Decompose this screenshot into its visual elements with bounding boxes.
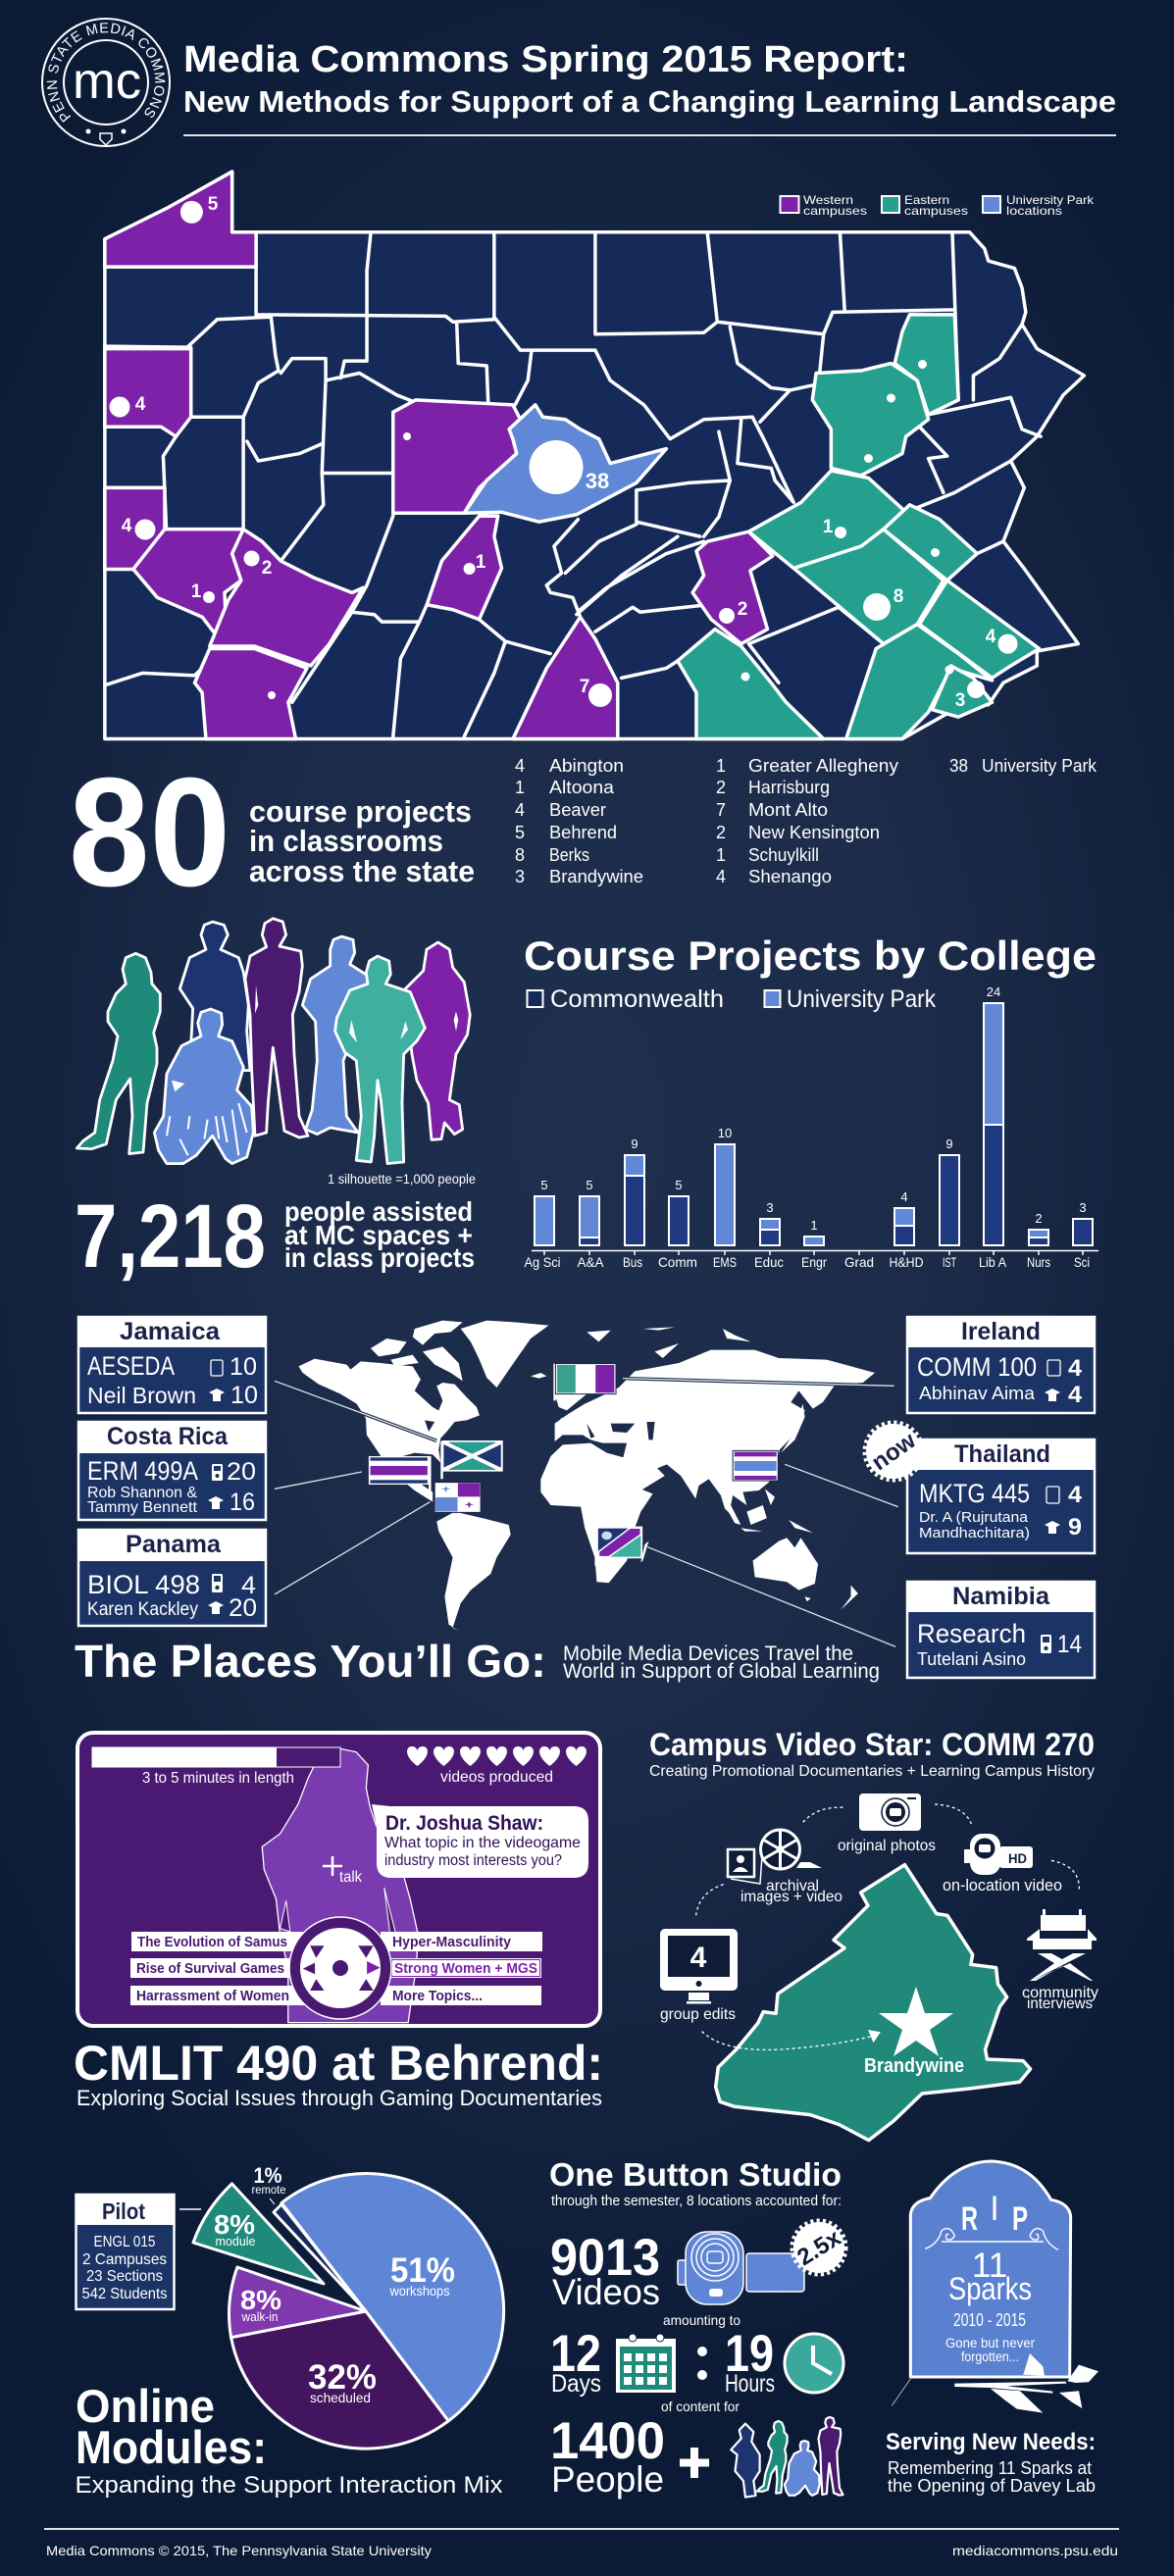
heading: The Places You'll Go: Mobile Media Devices Travel the [563, 1642, 853, 1665]
map of Pennsylvania campuses: 1 [191, 581, 202, 602]
flag: Ireland [555, 1364, 616, 1400]
map of Pennsylvania campuses: 1 [476, 552, 486, 573]
bar chart: course projects by college: 3 [1079, 1200, 1087, 1215]
icon: monitor with 4 group edits: 4 [690, 1942, 707, 1974]
bar chart: course projects by college: Nurs [1027, 1254, 1050, 1270]
campus project count list: 8 [515, 845, 525, 865]
card: Thailand: Thailand [954, 1440, 1050, 1468]
chart legend [528, 985, 936, 1013]
heading: The Places You'll Go: World in Support of Global Learning [563, 1660, 880, 1683]
connector lines from flags to destination cards [275, 1379, 898, 1646]
talk prompt: talk [339, 1869, 363, 1886]
bar chart: course projects by college: IST [943, 1254, 956, 1270]
campus project count list: 5 [515, 823, 525, 842]
flag: Thailand [732, 1450, 778, 1489]
icon: HD video camera: HD [1008, 1851, 1027, 1866]
heading: The Places You'll Go: The Places You’ll Go: [75, 1636, 546, 1687]
pie labels: walk-in [241, 2309, 279, 2324]
caption: Serving New Needs [886, 2429, 1096, 2496]
dashed process arcs [695, 1804, 1079, 2049]
campus project count list: 38 [949, 756, 968, 776]
campus project count list: 1 [716, 756, 726, 776]
heading: Campus Video Star [649, 1727, 1095, 1780]
caption: Serving New Needs: the Opening of Davey Lab [888, 2476, 1096, 2496]
label: Brandywine: Brandywine [864, 2055, 964, 2077]
slice: remote [274, 2204, 366, 2311]
campus project count list: 1 [716, 845, 726, 865]
campus project count list: 2 [716, 823, 726, 842]
silhouettes of people [77, 919, 470, 1164]
campus project count list: Shenango [748, 867, 832, 886]
topic menu [130, 1932, 542, 2005]
footer: mediacommons.psu.edu [952, 2543, 1118, 2558]
chart legend: University Park [787, 985, 936, 1013]
slice: scheduled [231, 2311, 448, 2449]
campus project count list: 4 [716, 867, 726, 886]
campus project count list: 3 [515, 867, 525, 886]
card: Costa Rica: Rob Shannon & [87, 1485, 197, 1501]
card: Panama: 4 [241, 1572, 256, 1599]
logo: Penn State Media Commons seal: PENN STATE MEDIA COMMONS [47, 23, 165, 123]
card: Ireland [906, 1316, 1096, 1413]
map legend: campuses [803, 204, 867, 218]
heading: CMLIT 490 at Behrend: CMLIT 490 at Behrend: [74, 2036, 603, 2091]
card: Ireland: 4 [1068, 1382, 1083, 1408]
callout: Pilot: 23 Sections [86, 2268, 163, 2285]
stat: 1400 people: 1400 [550, 2412, 665, 2470]
title: Media Commons Spring 2015 Report: [183, 39, 908, 80]
tombstone: 11 Sparks: P [1012, 2200, 1028, 2238]
footer [44, 2528, 1119, 2558]
card: Thailand: 9 [1068, 1514, 1082, 1541]
card: Costa Rica [77, 1421, 267, 1520]
tombstone: 11 Sparks [910, 2161, 1071, 2377]
map of Pennsylvania campuses: 5 [208, 194, 219, 215]
card: Namibia: 14 [1057, 1631, 1082, 1658]
map of Pennsylvania campuses: 1 [823, 517, 834, 537]
text: of content for: of content for [661, 2399, 740, 2414]
bar chart: course projects by college: 1 [810, 1218, 818, 1233]
slice: walk-in [230, 2267, 366, 2338]
card: Panama: Karen Kackley [87, 1599, 198, 1620]
map legend [781, 193, 1095, 218]
stat: 80 course projects: across the state [249, 854, 475, 888]
pie labels: 51% [390, 2251, 455, 2290]
map legend: locations [1006, 204, 1062, 218]
heading: The Places You'll Go [75, 1636, 880, 1687]
progress caption: 3 to 5 minutes in length [142, 1770, 294, 1787]
icon: calendar [616, 2334, 676, 2393]
title [183, 39, 1116, 136]
pie labels: remote [251, 2185, 286, 2197]
callout: Pilot: ENGL 015 [94, 2234, 156, 2250]
bar chart: course projects by college [524, 985, 1098, 1270]
campus project count list: New Kensington [748, 823, 880, 842]
stat: 7,218 people assisted: at MC spaces + [284, 1220, 473, 1250]
bar chart: course projects by college: Sci [1074, 1254, 1090, 1270]
campus project count list: Harrisburg [748, 778, 830, 797]
bar chart: course projects by college: 5 [675, 1178, 683, 1192]
pie labels: module [216, 2234, 255, 2248]
topic menu: Rise of Survival Games [136, 1961, 284, 1977]
card: Jamaica: Jamaica [120, 1318, 221, 1345]
map legend: campuses [904, 204, 968, 218]
world map [298, 1321, 875, 1631]
campus project count list: Schuylkill [748, 845, 819, 865]
heading: Online Modules: Online [76, 2380, 215, 2432]
card: Jamaica: 10 [230, 1382, 258, 1409]
flowers at tombstone [892, 2353, 1098, 2413]
bar chart: course projects by college: 2 [1035, 1211, 1043, 1226]
card: Costa Rica: 20 [227, 1458, 256, 1486]
card: Namibia: Namibia [952, 1583, 1050, 1610]
icon: director's chair [1027, 1909, 1097, 1981]
bar chart: course projects by college: EMS [713, 1254, 737, 1270]
bar chart: course projects by college: 5 [586, 1178, 593, 1192]
badge: now: now [867, 1427, 921, 1476]
stat: 9013 videos: Videos [552, 2272, 660, 2312]
bar chart: course projects by college: 24 [987, 985, 1000, 999]
heading: Online Modules: Expanding the Support Interaction Mix [75, 2472, 502, 2499]
stat: 1400 people [550, 2412, 665, 2500]
pie labels: scheduled [310, 2390, 371, 2405]
speech bubble: Dr. Joshua Shaw: Dr. Joshua Shaw: [385, 1812, 543, 1835]
campus project count list: Behrend [549, 823, 617, 842]
label: archival images + video [740, 1878, 842, 1905]
bar chart: course projects by college: Engr [801, 1254, 827, 1270]
pie labels: 32% [308, 2358, 377, 2397]
callout: Pilot [75, 2194, 201, 2309]
chart legend: Commonwealth [550, 985, 724, 1013]
icon: HD video camera [964, 1834, 1033, 1875]
speech bubble: Dr. Joshua Shaw: What topic in the videogame [384, 1835, 581, 1851]
map legend: University Park [1006, 193, 1095, 207]
bar chart: course projects by college: Educ [754, 1254, 784, 1270]
label: archival images + video: archival [766, 1878, 819, 1894]
map of Pennsylvania campuses: 4 [986, 627, 996, 647]
stat: 7,218 people assisted [75, 1187, 475, 1287]
tombstone: 11 Sparks: forgotten... [961, 2349, 1019, 2364]
heading: Campus Video Star: Campus Video Star: COMM 270 [649, 1727, 1095, 1762]
card: Thailand: Dr. A (Rujrutana [919, 1509, 1029, 1526]
title: New Methods for Support of a Changing Learning Landscape [183, 84, 1116, 119]
campus project count list: 7 [716, 800, 726, 820]
bar chart: course projects by college: 5 [540, 1178, 548, 1192]
campus project count list: University Park [982, 756, 1097, 776]
tombstone: 11 Sparks: I [992, 2190, 997, 2228]
caption: Serving New Needs: Serving New Needs: [886, 2429, 1096, 2455]
campus project count list: Abington [549, 756, 624, 776]
panel: CMLIT 490 video game interface [77, 1733, 600, 2026]
card: Ireland: 4 [1068, 1355, 1083, 1382]
stat: 7,218 people assisted: people assisted [284, 1196, 473, 1227]
card: Namibia [906, 1581, 1096, 1678]
card: Ireland: Abhinav Aima [919, 1384, 1036, 1403]
bar chart: course projects by college: 9 [945, 1136, 953, 1151]
stat: 19 hours: Hours [725, 2370, 775, 2398]
pie labels: 1% [253, 2163, 282, 2188]
bar chart: course projects by college: 9 [631, 1136, 638, 1151]
card: Thailand [906, 1439, 1096, 1553]
pie chart: support interaction mix [193, 2174, 504, 2449]
campus project count list: Brandywine [549, 867, 643, 886]
card: Panama: BIOL 498 [87, 1570, 200, 1599]
stat: 19 hours: 19 [725, 2325, 774, 2383]
campus project count list: Berks [549, 845, 589, 865]
callout: Pilot: 542 Students [82, 2286, 167, 2302]
stat: 80 course projects [69, 746, 475, 919]
map of Pennsylvania campuses: 4 [122, 516, 132, 536]
stat: 9013 videos [550, 2229, 660, 2312]
topic menu: Strong Women + MGS [394, 1961, 537, 1977]
stat: 9013 videos: 9013 [550, 2229, 660, 2287]
star: Brandywine [879, 1987, 953, 2056]
badge: 2.5x: 2.5x [792, 2224, 846, 2271]
campus project count list [515, 756, 1097, 886]
pie labels: 8% [240, 2285, 281, 2315]
card: Thailand: 4 [1068, 1482, 1083, 1508]
bar chart: course projects by college: Ag Sci [524, 1254, 561, 1270]
icon: photo camera [859, 1793, 921, 1831]
label: group edits: group edits [660, 2006, 736, 2023]
card: Costa Rica: 16 [230, 1489, 255, 1516]
heading: One Button Studio [549, 2156, 842, 2209]
talk prompt [323, 1856, 363, 1886]
stat: 7,218 people assisted: 7,218 [75, 1187, 266, 1287]
map of Pennsylvania campuses: 7 [580, 677, 589, 697]
tombstone: 11 Sparks: R [961, 2200, 978, 2238]
map legend: Eastern [904, 193, 949, 207]
footer: Media Commons © 2015, The Pennsylvania State University [46, 2543, 432, 2558]
card: Jamaica: AESEDA [87, 1351, 175, 1381]
card: Jamaica: Neil Brown [87, 1383, 196, 1408]
heading: CMLIT 490 at Behrend: Exploring Social Issues through Gaming Documentaries [77, 2086, 602, 2110]
pie labels [214, 2163, 455, 2405]
flag: Costa Rica [369, 1456, 430, 1495]
hearts caption: videos produced [440, 1769, 553, 1786]
icon: camcorder [678, 2232, 804, 2304]
topic menu: Harrassment of Women [136, 1989, 289, 2004]
card: Jamaica: 10 [230, 1353, 257, 1381]
hearts: videos produced [407, 1746, 587, 1766]
heading: Campus Video Star: Creating Promotional Documentaries + Learning Campus History [649, 1763, 1095, 1780]
stat: 80 course projects: in classrooms [249, 824, 443, 858]
label: community interviews: community [1022, 1985, 1098, 2001]
tombstone: 11 Sparks: Gone but never [945, 2335, 1035, 2350]
icon: monitor with 4 group edits [660, 1929, 738, 2004]
card: Ireland: COMM 100 [917, 1352, 1037, 1382]
silhouette of speaker [262, 1748, 418, 2023]
campus project count list: 4 [515, 756, 525, 776]
stat: 80 course projects: course projects [249, 794, 472, 829]
label: community interviews [1022, 1985, 1098, 2012]
slice: workshops [281, 2174, 504, 2421]
card: Costa Rica: Tammy Bennett [87, 1499, 198, 1516]
tombstone: 11 Sparks: Sparks [948, 2271, 1032, 2306]
plus sign [680, 2448, 709, 2478]
caption: Serving New Needs: Remembering 11 Sparks at [888, 2458, 1092, 2478]
pie labels: workshops [389, 2283, 449, 2298]
stat: 1400 people: People [551, 2459, 664, 2500]
campus project count list: 4 [515, 800, 525, 820]
card: Thailand: Mandhachitara) [919, 1525, 1030, 1541]
card: Panama: Panama [126, 1531, 222, 1558]
bar chart: course projects by college: A&A [577, 1254, 604, 1270]
heading: Online Modules [75, 2380, 502, 2499]
campus project count list: 1 [515, 778, 525, 797]
map of Pennsylvania campuses: 8 [893, 586, 903, 607]
bar chart: course projects by college: 4 [900, 1189, 908, 1204]
map legend: Western [803, 193, 853, 207]
campus project count list: Beaver [549, 800, 606, 820]
text: amounting to: amounting to [663, 2312, 740, 2328]
tombstone: 11 Sparks: 11 [972, 2247, 1007, 2285]
card: Costa Rica: ERM 499A [87, 1456, 198, 1486]
map of Pennsylvania campuses [105, 172, 1084, 739]
card: Ireland: Ireland [961, 1318, 1041, 1345]
remote leader line [270, 2198, 275, 2204]
stat: 7,218 people assisted: in class projects [284, 1242, 475, 1273]
stat: 80 course projects: 80 [69, 746, 230, 919]
flag: Jamaica [442, 1441, 502, 1479]
silhouette scale note: 1 silhouette =1,000 people [328, 1172, 476, 1187]
bar chart: course projects by college: Bus [623, 1254, 642, 1270]
map of Pennsylvania campuses: 2 [738, 599, 747, 620]
icon: film reel and photos [728, 1830, 822, 1884]
silhouettes: four people [731, 2417, 842, 2498]
bar chart: course projects by college: Comm [658, 1254, 697, 1270]
card: Panama: 20 [229, 1594, 257, 1622]
card: Costa Rica: Costa Rica [107, 1423, 229, 1450]
map of Pennsylvania campuses: 38 [586, 469, 609, 493]
heading: Online Modules: Modules: [76, 2421, 267, 2473]
bar chart: course projects by college: H&HD [889, 1254, 924, 1270]
card: Namibia: Tutelani Asino [917, 1649, 1026, 1669]
bar chart: course projects by college: 3 [766, 1200, 774, 1215]
speech bubble: Dr. Joshua Shaw [372, 1804, 588, 1878]
callout: Pilot: Pilot [102, 2198, 145, 2224]
slice: module [193, 2184, 324, 2284]
card: Panama [77, 1529, 267, 1626]
topic menu: The Evolution of Samus [137, 1935, 287, 1950]
colon [697, 2347, 707, 2380]
map of Pennsylvania campuses: 2 [262, 558, 272, 579]
bar chart: course projects by college: Grad [844, 1254, 874, 1270]
label: on-location video: on-location video [943, 1877, 1062, 1894]
campus project count list: Altoona [549, 778, 615, 797]
topic menu: Hyper-Masculinity [392, 1935, 511, 1950]
map of Pennsylvania campuses: 4 [135, 394, 146, 415]
icon: clock [785, 2334, 843, 2393]
callout: Pilot: 2 Campuses [82, 2251, 167, 2268]
card: Namibia: Research [917, 1619, 1026, 1648]
label: community interviews: interviews [1027, 1995, 1093, 2012]
stat: 12 days: Days [551, 2370, 601, 2398]
heading: course projects by college: Course Projects by College [524, 933, 1097, 979]
campus project count list: 2 [716, 778, 726, 797]
heading: One Button Studio: One Button Studio [549, 2156, 842, 2193]
bar chart: course projects by college: Lib A [979, 1254, 1007, 1270]
card: Jamaica [77, 1316, 267, 1413]
flag: Panama [434, 1483, 481, 1512]
label: original photos: original photos [838, 1838, 936, 1854]
tombstone: 11 Sparks: 2010 - 2015 [953, 2310, 1026, 2330]
stat: 12 days: 12 [550, 2325, 601, 2383]
controller wheel [289, 1917, 391, 2019]
topic menu: More Topics... [392, 1989, 483, 2004]
bar chart: course projects by college: 10 [718, 1126, 732, 1140]
map of Pennsylvania campuses: 3 [955, 690, 965, 711]
speech bubble: Dr. Joshua Shaw: industry most interests you? [384, 1852, 562, 1869]
heading: One Button Studio: through the semester, 8 locations accounted for: [551, 2193, 842, 2209]
video progress bar [92, 1747, 340, 1767]
campus project count list: Mont Alto [748, 800, 828, 820]
pie labels: 8% [214, 2209, 255, 2240]
logo: Penn State Media Commons seal: mc [73, 53, 141, 110]
label: archival images + video: images + video [740, 1889, 842, 1905]
card: Thailand: MKTG 445 [919, 1479, 1030, 1508]
Brandywine county shape [716, 1865, 1031, 2141]
campus project count list: Greater Allegheny [748, 756, 898, 776]
flag: Namibia [596, 1528, 641, 1566]
